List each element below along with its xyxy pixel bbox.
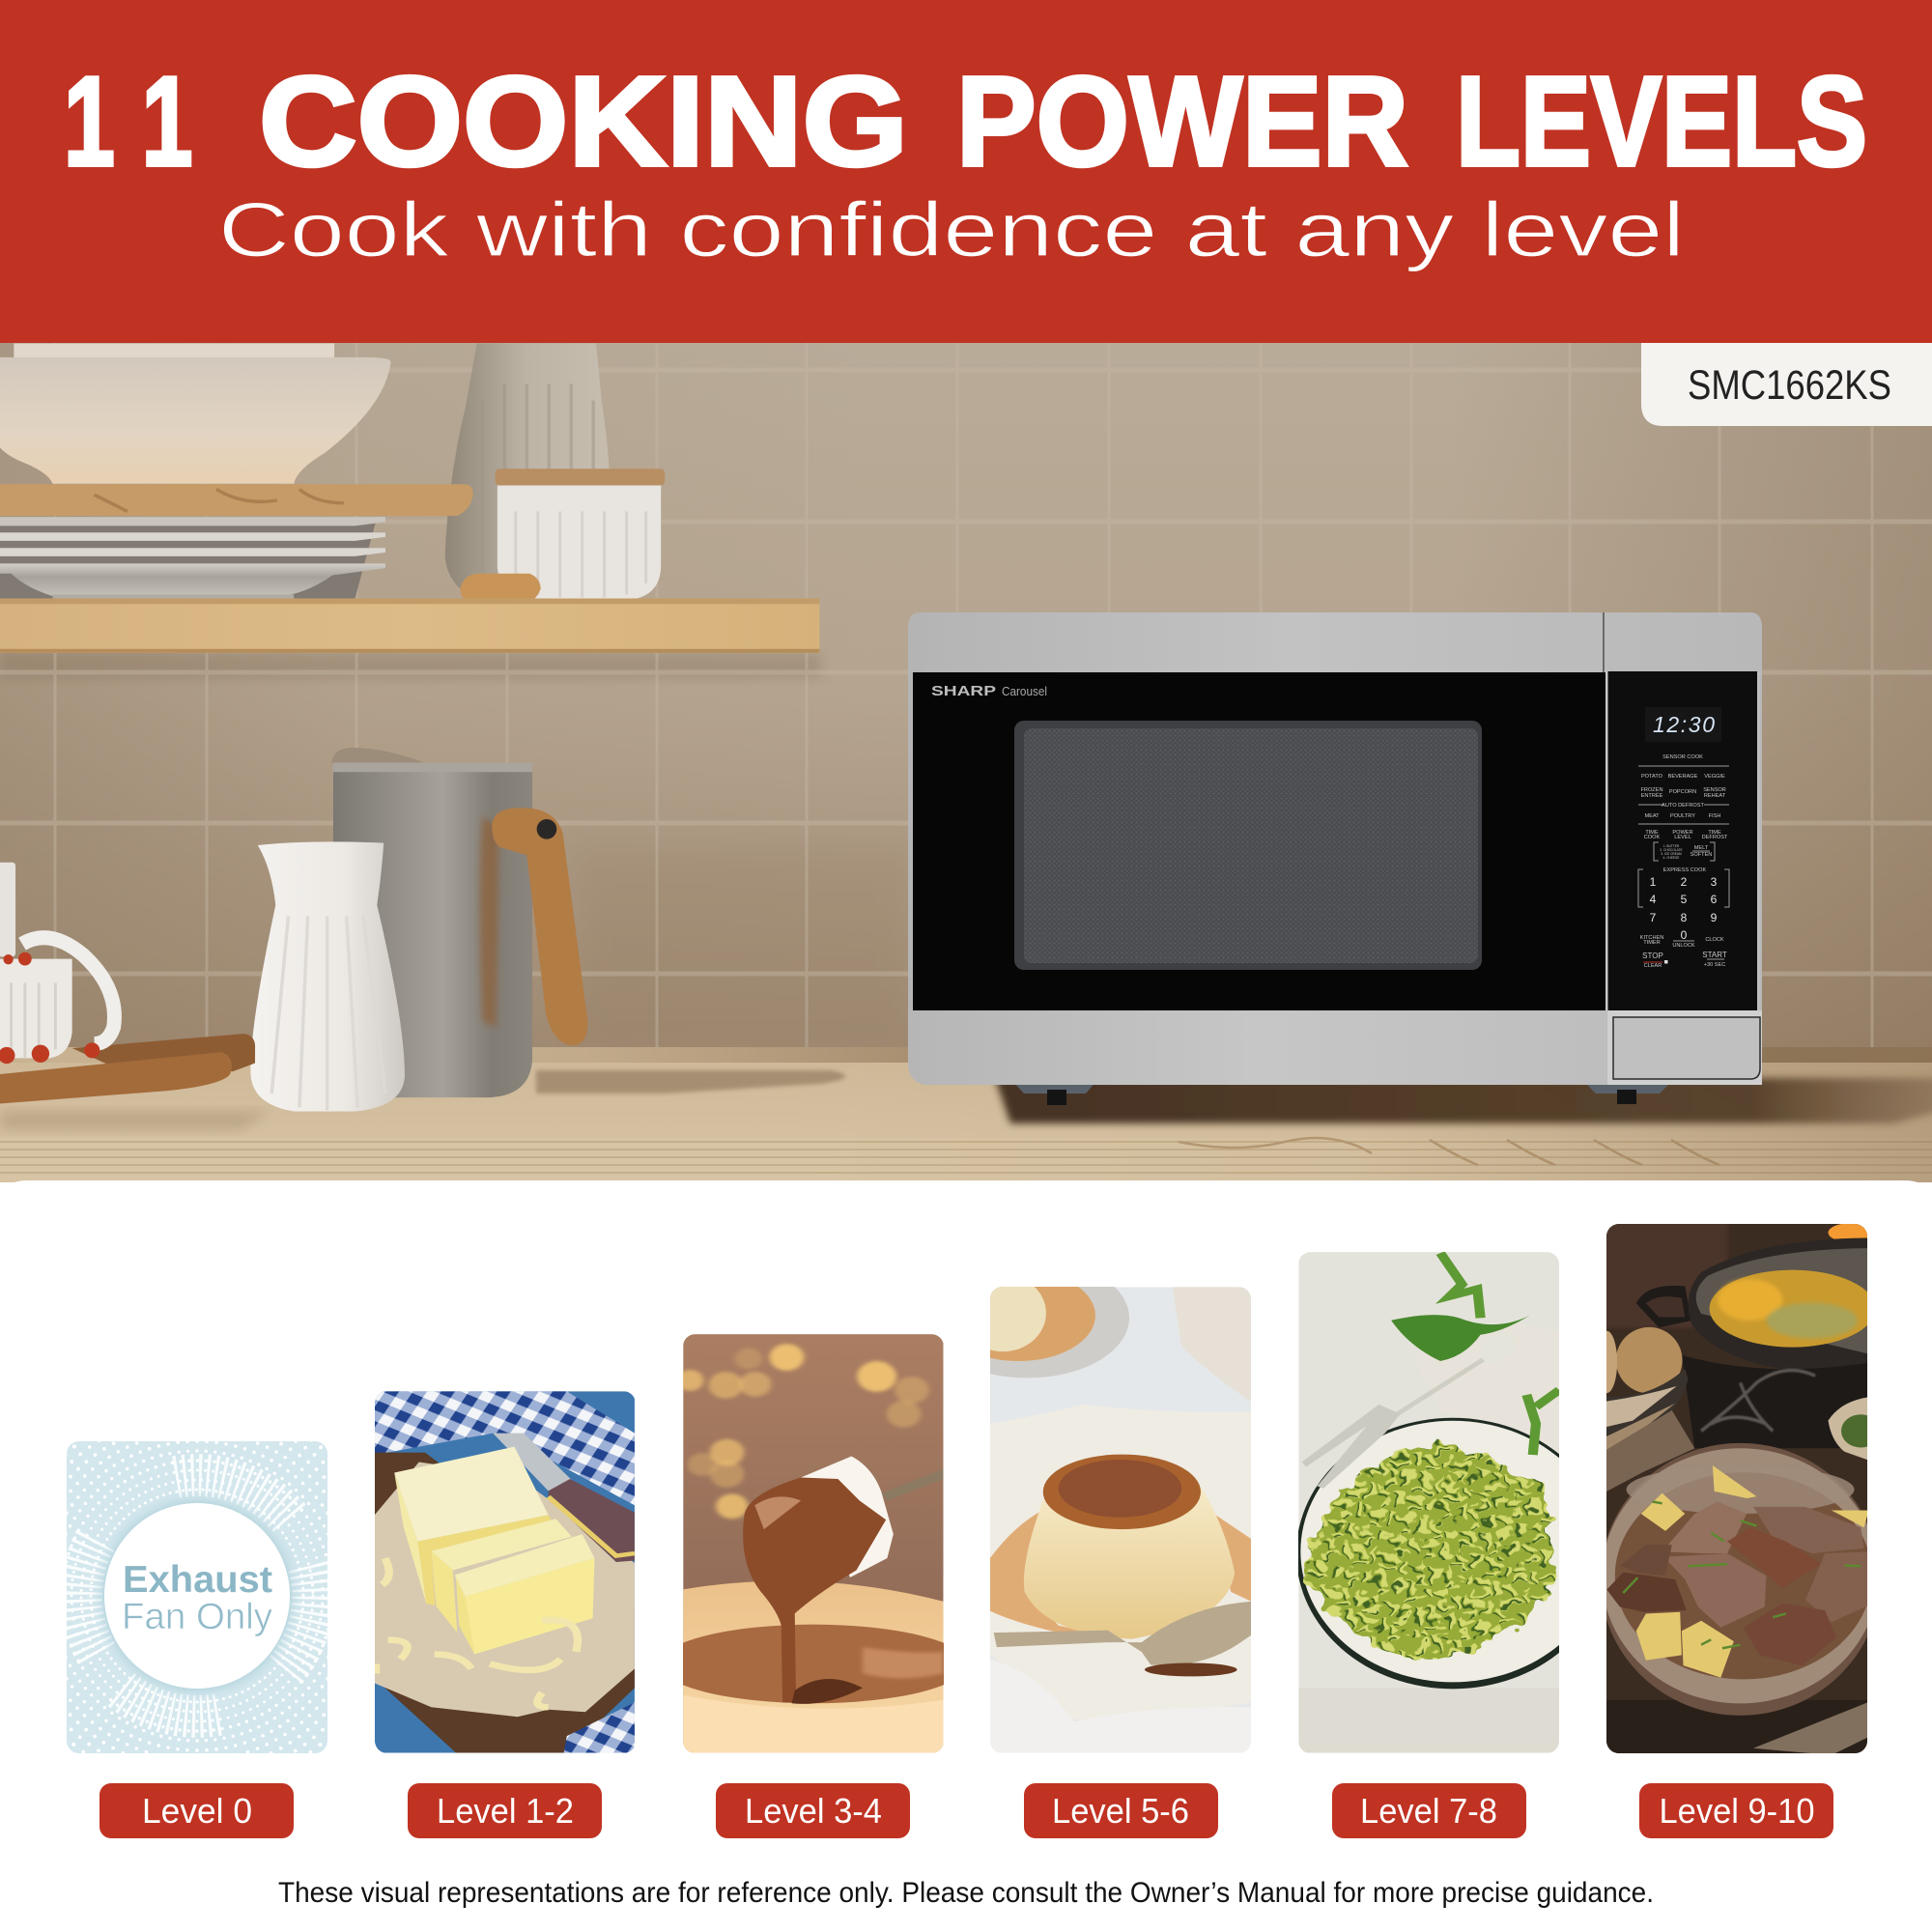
control labels: REHEAT	[1704, 793, 1726, 799]
steam	[1701, 1371, 1815, 1431]
card: butter	[375, 1391, 635, 1753]
ribbed cup	[0, 959, 72, 1058]
number keys: 4	[1650, 893, 1657, 906]
control labels	[1640, 754, 1728, 969]
control labels: STOP	[1642, 952, 1663, 960]
white jug	[250, 841, 405, 1111]
number keys: 6	[1711, 893, 1718, 906]
label: level 7-8: Level 7-8	[1360, 1791, 1497, 1831]
small bowl	[1829, 1397, 1880, 1462]
number keys: 9	[1711, 911, 1718, 924]
napkin	[1412, 1322, 1559, 1476]
control labels: 1. BUTTER	[1663, 844, 1680, 848]
number keys: 7	[1650, 911, 1657, 924]
basil sprigs	[1440, 1253, 1559, 1455]
label: level 3-4: Level 3-4	[745, 1791, 882, 1831]
bowl lip	[683, 1695, 943, 1753]
label: level 3-4	[716, 1783, 910, 1838]
chocolate pool	[659, 1625, 967, 1703]
control labels: 3. ICE CREAM	[1661, 852, 1682, 856]
title: 11	[64, 51, 192, 193]
control labels: POTATO	[1641, 774, 1663, 780]
control labels: LEVEL	[1674, 835, 1691, 840]
brand text	[931, 686, 1047, 696]
control labels: UNLOCK	[1672, 943, 1695, 949]
card: flan	[926, 1258, 1251, 1753]
brand text: Carousel	[1002, 684, 1047, 698]
control labels: TIME	[1708, 830, 1721, 836]
cutting boards	[0, 1034, 255, 1103]
label: level 5-6	[1024, 1783, 1218, 1838]
control labels: MEAT	[1644, 813, 1660, 819]
number keys: 2	[1681, 875, 1688, 889]
number keys	[1650, 875, 1718, 942]
control labels: POPCORN	[1669, 789, 1696, 795]
mushrooms	[1597, 1327, 1683, 1393]
panel: kitchen scene	[0, 343, 1932, 1182]
control labels: KITCHEN	[1640, 935, 1663, 941]
wood table	[1604, 1700, 1874, 1755]
label: level 1-2: Level 1-2	[437, 1791, 574, 1831]
stacked plates	[0, 517, 385, 603]
back plate	[1173, 1287, 1251, 1402]
control labels: VEGGIE	[1704, 774, 1725, 780]
label: level 0	[99, 1783, 294, 1838]
soup	[1710, 1270, 1875, 1348]
bottom drawer	[1607, 1010, 1762, 1085]
card: melted chocolate	[659, 1334, 967, 1753]
chopping board	[375, 1453, 635, 1753]
control labels: 4. CHEESE	[1663, 856, 1679, 860]
top band seam	[1603, 612, 1605, 672]
warm background	[1604, 1217, 1874, 1755]
control labels: 2. CHOCOLATE	[1660, 848, 1683, 852]
subtitle: Cook with confidence at any level	[218, 186, 1685, 272]
fan label: Fan Only	[122, 1597, 272, 1637]
number keys: 5	[1681, 893, 1688, 906]
model tag	[1641, 343, 1932, 426]
flan body	[1024, 1486, 1235, 1639]
wooden knob	[460, 574, 541, 599]
checked cloth	[375, 1391, 635, 1505]
fire glow	[1829, 1223, 1874, 1242]
number keys: 3	[1711, 875, 1718, 889]
table	[1604, 1410, 1694, 1493]
napkin	[990, 1660, 1251, 1753]
herbs	[1623, 1502, 1861, 1648]
potatoes	[1636, 1465, 1869, 1678]
control labels: SOFTEN	[1690, 852, 1712, 858]
beef pieces	[1606, 1502, 1869, 1665]
spoon	[994, 1602, 1251, 1665]
spoon handle	[881, 1469, 943, 1500]
red berries	[0, 952, 99, 1064]
label: level 9-10: Level 9-10	[1660, 1791, 1814, 1831]
wood board	[0, 484, 473, 516]
model tag: SMC1662KS	[1688, 362, 1891, 409]
control labels: COOK	[1644, 835, 1660, 840]
pasta	[1308, 1440, 1551, 1659]
control labels: POULTRY	[1670, 813, 1695, 819]
control labels: START	[1702, 951, 1727, 959]
fan dot rings	[0, 1391, 402, 1801]
large white bowl	[0, 357, 391, 484]
label: level 0: Level 0	[142, 1791, 252, 1831]
label: level 7-8	[1332, 1783, 1526, 1838]
card: exhaust fan only	[0, 1391, 402, 1801]
ring lid	[22, 938, 114, 1043]
control labels: BEVERAGE	[1668, 774, 1698, 780]
shelf objects	[0, 343, 819, 1111]
vase on shelf	[445, 343, 610, 589]
caramel top	[1043, 1455, 1201, 1529]
parchment	[375, 1463, 635, 1717]
control labels: SENSOR COOK	[1662, 754, 1703, 760]
lidded canister	[496, 469, 665, 600]
white cup behind	[0, 863, 15, 956]
back pot	[1636, 1237, 1875, 1376]
plate	[1296, 1418, 1609, 1689]
control labels: SENSOR	[1703, 787, 1726, 793]
footnote: These visual representations are for reference only. Please consult the Owner’s Manual for more precise guidance.	[278, 1877, 1654, 1909]
caramel sauce	[990, 1510, 1251, 1640]
basil leaf	[1391, 1315, 1530, 1361]
control labels: TIMER	[1643, 940, 1661, 946]
tiled wall	[0, 343, 1932, 1048]
panel: power levels	[0, 1180, 1932, 1932]
title: POWER	[956, 50, 1408, 192]
microwave	[908, 612, 1762, 1105]
back bowl	[14, 344, 334, 357]
fork	[1302, 1326, 1525, 1489]
control labels: DEFROST	[1702, 835, 1728, 840]
control labels: MELT	[1694, 845, 1709, 851]
fan label	[122, 1559, 272, 1637]
control labels: FISH	[1709, 813, 1720, 819]
wooden shelf	[0, 599, 819, 653]
control labels: ENTRÉE	[1641, 792, 1663, 799]
clock display	[1645, 707, 1721, 742]
brand text: SHARP	[931, 683, 996, 699]
clock display: 12:30	[1653, 712, 1715, 737]
marshmallow	[801, 1457, 894, 1577]
control labels: +30 SEC	[1704, 962, 1725, 968]
chocolate coating	[743, 1477, 886, 1702]
counter top	[0, 1047, 1932, 1182]
cream bowl	[683, 1581, 943, 1753]
wood handle	[492, 808, 587, 1045]
door window	[1014, 721, 1482, 970]
door front	[913, 672, 1605, 1010]
steel pitcher	[331, 748, 532, 1097]
rustic side dish	[1604, 1369, 1689, 1452]
microwave shadow	[995, 1078, 1932, 1123]
card: pesto pasta	[1296, 1252, 1609, 1753]
control labels: TIME	[1645, 830, 1659, 836]
stew plate	[1601, 1443, 1880, 1716]
label: level 1-2	[408, 1783, 602, 1838]
control labels: FROZEN	[1640, 787, 1663, 793]
header band	[0, 0, 1932, 343]
fan hub	[91, 1490, 303, 1702]
butter block	[394, 1447, 594, 1655]
microwave feet	[1016, 1085, 1668, 1105]
lower cloth	[564, 1702, 635, 1753]
fan label: Exhaust	[123, 1559, 272, 1601]
card: beef stew	[1597, 1217, 1880, 1755]
lace plate	[990, 1405, 1251, 1719]
control labels: AUTO DEFROST	[1662, 803, 1704, 809]
control labels: CLEAR	[1644, 963, 1662, 969]
label: level 9-10	[1639, 1783, 1833, 1838]
knife	[493, 1434, 635, 1562]
control panel	[1605, 671, 1760, 1010]
number keys: 8	[1681, 911, 1688, 924]
steel body	[908, 612, 1762, 1085]
butter curls	[376, 1558, 578, 1707]
back dish	[926, 1258, 1129, 1378]
number keys: 0	[1681, 928, 1688, 942]
label: level 5-6: Level 5-6	[1052, 1791, 1189, 1831]
bokeh lights	[676, 1344, 929, 1519]
title: COOKING	[259, 50, 908, 192]
black pot body	[1682, 1355, 1874, 1448]
control labels: CLOCK	[1705, 937, 1724, 943]
control labels: POWER	[1672, 830, 1693, 836]
pitcher shadow	[536, 1070, 845, 1094]
number keys: 1	[1650, 875, 1657, 889]
control labels: EXPRESS COOK	[1663, 867, 1706, 873]
title	[64, 50, 1867, 193]
bottom steel band	[908, 1010, 1606, 1085]
